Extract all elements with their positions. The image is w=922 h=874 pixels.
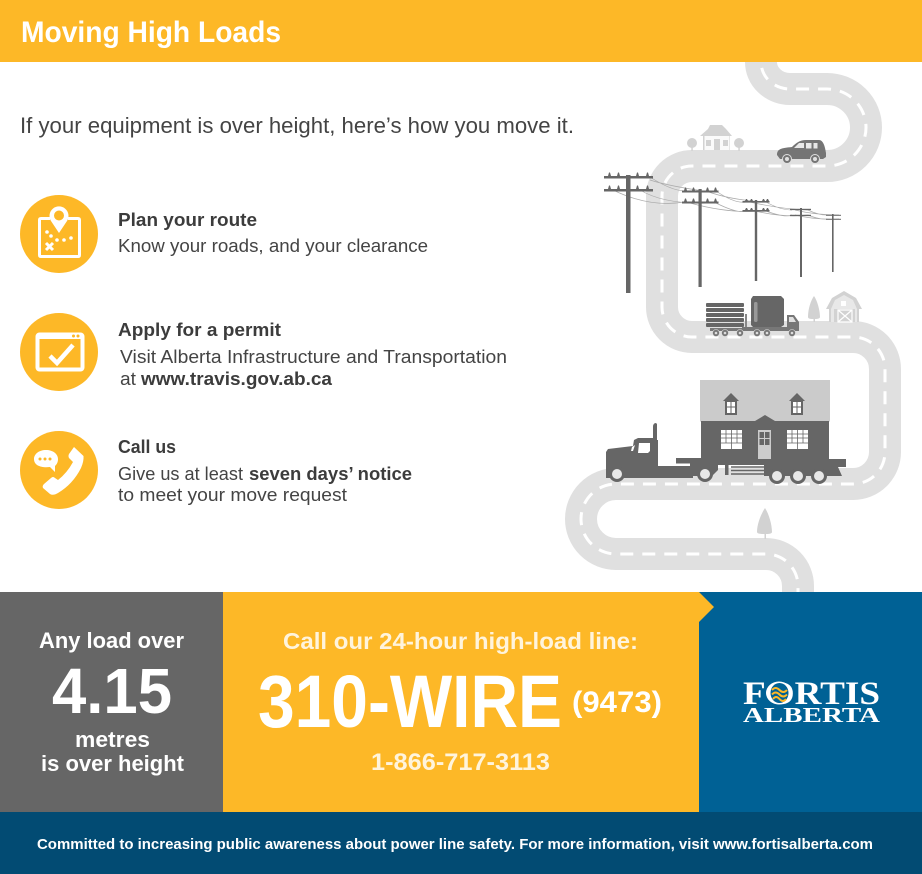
step 3 text: seven days’ notice — [249, 464, 412, 484]
pole 1 — [604, 172, 653, 293]
step 2 icon: online check window — [20, 313, 98, 391]
footer: Committed to increasing public awareness about power line safety. For more information, visit www.fortisalberta.com — [37, 836, 873, 853]
panel: height limit: metres — [75, 727, 150, 752]
house body — [701, 415, 846, 476]
panel: logo — [699, 592, 922, 812]
roadside tree lower — [757, 508, 772, 539]
panel: height limit: 4.15 — [52, 655, 172, 727]
logo: FortisAlberta: FORTIS — [743, 676, 880, 712]
step 2 text: at — [120, 369, 136, 389]
panel: height limit — [0, 592, 223, 812]
logo: FortisAlberta: ALBERTA — [743, 703, 881, 727]
power lines — [604, 172, 841, 293]
pole 5 — [826, 214, 841, 272]
roadside house and trees — [687, 125, 744, 151]
step 2 text: www.travis.gov.ab.ca — [140, 369, 333, 389]
winding road — [581, 62, 885, 592]
step 3 heading: Call us — [118, 437, 176, 457]
title: Moving High Loads — [21, 16, 281, 49]
header band — [0, 0, 922, 62]
step 2 heading: Apply for a permit — [118, 320, 281, 340]
footer — [0, 812, 922, 874]
tractor unit — [606, 423, 718, 478]
step 3 text: to meet your move request — [118, 485, 347, 505]
door — [758, 430, 771, 459]
panel: high-load phone line: 310-WIRE — [258, 660, 562, 743]
dormers — [723, 393, 805, 415]
roadside tree and barn — [808, 291, 862, 322]
step 1 icon: route map — [20, 195, 98, 273]
step 1 text: Know your roads, and your clearance — [118, 236, 428, 256]
trailer deck — [676, 458, 702, 464]
step 1 heading: Plan your route — [118, 210, 257, 230]
wheels — [609, 466, 827, 484]
intro text: If your equipment is over height, here’s how you move it. — [20, 113, 574, 138]
panel: high-load phone line — [223, 592, 699, 812]
step 3 text — [118, 464, 412, 505]
panel: height limit: is over height — [41, 751, 185, 776]
pole 4 — [790, 208, 811, 277]
pole 2 — [682, 188, 718, 287]
truck hauling a house — [606, 380, 846, 484]
panel: high-load phone line: (9473) — [572, 686, 662, 719]
panel: high-load phone line: Call our 24-hour high-load line: — [283, 628, 638, 654]
panel: high-load phone line: 1-866-717-3113 — [371, 749, 550, 776]
logo: FortisAlberta — [743, 676, 881, 727]
pole 3 — [742, 199, 770, 281]
step 2 text: Visit Alberta Infrastructure and Transportation — [120, 347, 507, 367]
step 3 icon: phone and speech bubble — [20, 431, 98, 509]
panel: height limit: Any load over — [39, 628, 184, 653]
house roof — [700, 380, 830, 422]
step 3 text: Give us at least — [118, 464, 243, 484]
house windows — [721, 430, 808, 449]
car — [777, 140, 826, 164]
flatbed truck with pipes and tank — [706, 296, 799, 336]
step 2 text — [120, 347, 507, 389]
